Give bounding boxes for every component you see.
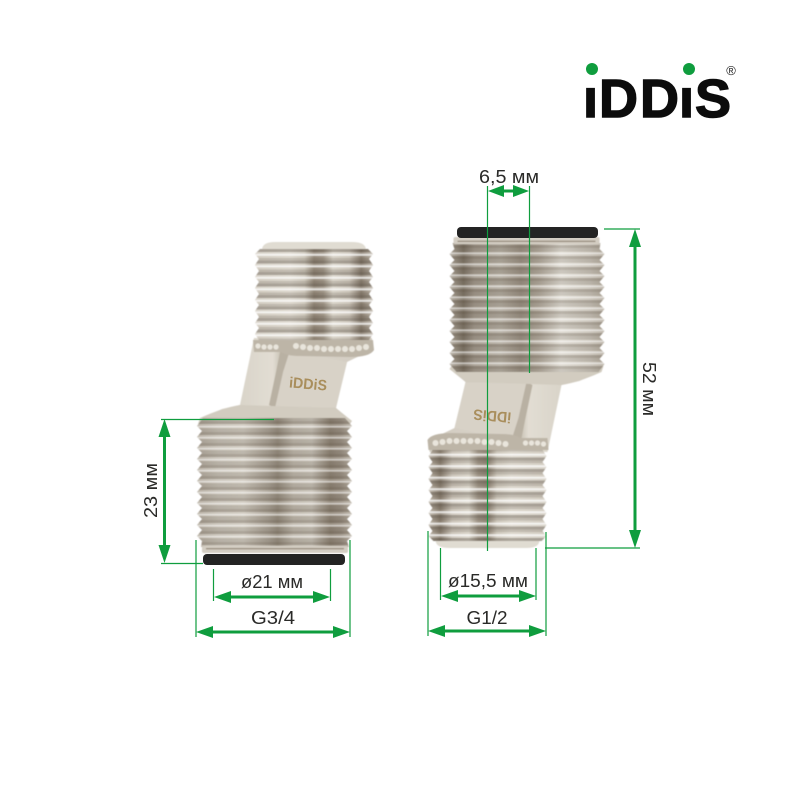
rubber seal <box>203 554 345 565</box>
dimension: diameter 21 mm <box>214 569 330 603</box>
dimension: 23 mm height: 23 мм <box>140 463 161 518</box>
right fitting photo <box>428 227 604 548</box>
dimension: 6,5 mm <box>479 166 539 551</box>
registered mark: ® <box>726 63 736 78</box>
dimension: G3/4: G3/4 <box>251 607 295 628</box>
left fitting photo <box>197 242 374 565</box>
dimension: diameter 15,5 mm: ø15,5 мм <box>448 570 528 591</box>
logo wordmark: ıDDıS <box>583 69 731 129</box>
engraved brand: iDDiS <box>473 405 512 426</box>
dimension: G3/4 <box>196 540 350 638</box>
dimension: diameter 21 mm: ø21 мм <box>241 571 303 592</box>
fitting body G1/2 <box>428 237 604 548</box>
dimension: 52 mm: 52 мм <box>639 362 660 416</box>
fitting body G3/4 <box>197 242 374 553</box>
dimension: 23 mm height <box>140 419 274 564</box>
dimension: diameter 15,5 mm <box>440 548 536 602</box>
logo dot right <box>683 63 695 75</box>
engraved brand: iDDiS <box>288 374 328 395</box>
dimension: 52 mm <box>545 229 660 548</box>
logo dot left <box>586 63 598 75</box>
rubber seal <box>457 227 598 238</box>
dimension: G1/2 <box>428 531 546 637</box>
dimension: G1/2: G1/2 <box>466 607 508 628</box>
dimension: 6,5 mm: 6,5 мм <box>479 166 539 187</box>
logo: IDDIS <box>583 63 736 129</box>
